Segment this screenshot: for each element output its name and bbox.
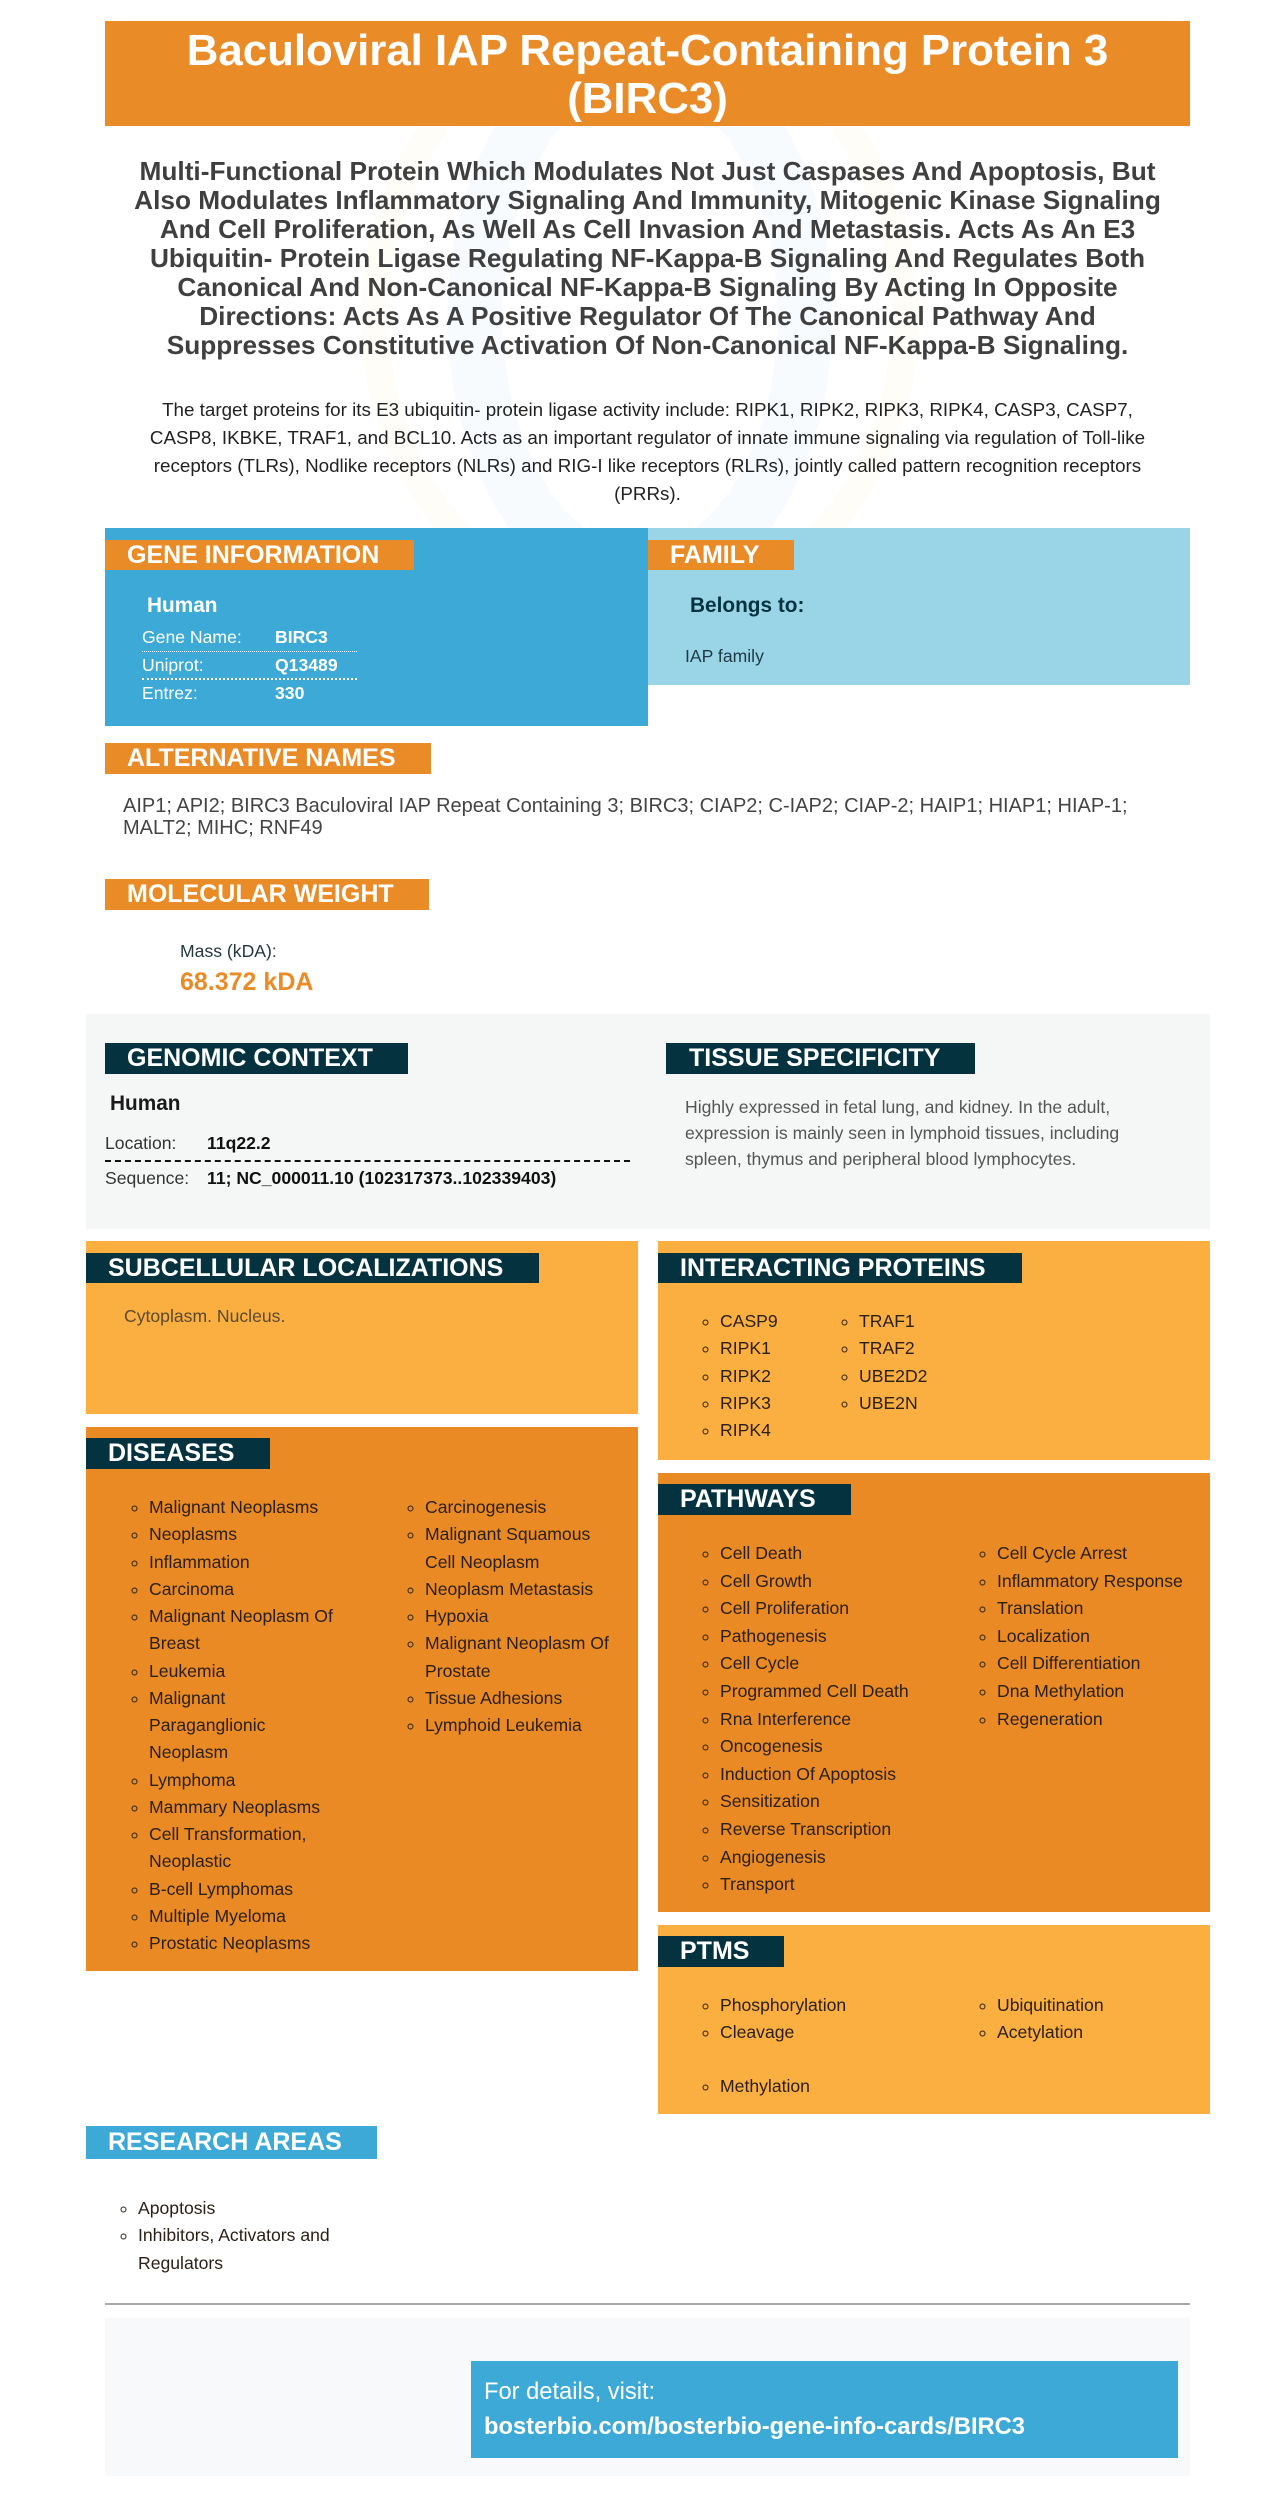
description text block: The target proteins for its E3 ubiquitin- protein ligase activity include: RIPK1, RIPK2, RIPK3, RIPK4, CASP3, CASP7, [162,399,1133,420]
disease list column 1: Paraganglionic [149,1715,265,1735]
gene info table: Gene Name: [142,627,242,647]
genomic table: 11q22.2 [207,1133,271,1153]
panel: genomic context and tissue specificity [86,1014,1210,1229]
disease list column 2: Cell Neoplasm [425,1552,539,1572]
disease list column 1: Carcinoma [149,1579,234,1599]
disease list column 1: Mammary Neoplasms [149,1797,320,1817]
tissue specificity text: Highly expressed in fetal lung, and kidney. In the adult, [685,1097,1110,1117]
disease list column 1: Breast [149,1633,200,1653]
panel: interacting proteins [658,1241,1210,1460]
disease list column 1 [132,1497,333,1953]
heading: genomic context: GENOMIC CONTEXT [127,1044,373,1072]
subtitle text block: Canonical And Non-Canonical NF-Kappa-B Signaling By Acting In Opposite [177,272,1118,302]
disease list column 1: B-cell Lymphomas [149,1878,293,1898]
description text block [150,399,1145,504]
disease list column 2: Hypoxia [425,1606,489,1626]
description text block: receptors (TLRs), Nodlike receptors (NLRs) and RIG-I like receptors (RLRs), jointly called pattern recognition receptors [154,455,1141,476]
heading: family [648,540,794,570]
subtitle text block: Multi-Functional Protein Which Modulates Not Just Caspases And Apoptosis, But [140,156,1156,186]
heading: PTMs [658,1936,784,1967]
pathway list column 1: Cell Death [720,1543,802,1563]
callout url: bosterbio.com/bosterbio-gene-info-cards/BIRC3 [484,2414,1025,2440]
localization text: Cytoplasm. Nucleus. [124,1306,285,1326]
description text block: CASP8, IKBKE, TRAF1, and BCL10. Acts as an important regulator of innate immune signaling via regulation of Toll-like [150,427,1145,448]
description text block: (PRRs). [614,483,681,504]
pathway list column 1: Cell Growth [720,1571,812,1591]
pathway list column 1: Pathogenesis [720,1626,827,1646]
pathway list column 1: Oncogenesis [720,1736,823,1756]
disease list column 2: Malignant Neoplasm Of [425,1633,609,1653]
alternative names text: MALT2; MIHC; RNF49 [123,817,323,839]
pathway list column 2: Dna Methylation [997,1681,1124,1701]
heading: research areas [86,2126,377,2159]
pathway list column 2: Regeneration [997,1709,1103,1729]
research areas list: Apoptosis [138,2198,215,2218]
pathway list column 1: Angiogenesis [720,1847,826,1867]
tissue specificity text: spleen, thymus and peripheral blood lymphocytes. [685,1149,1076,1169]
subtitle text block: Ubiquitin- Protein Ligase Regulating NF-Kappa-B Signaling And Regulates Both [150,243,1145,273]
heading: pathways [658,1484,851,1515]
pathway list column 1: Cell Cycle [720,1653,799,1673]
gene info table: Q13489 [275,655,338,675]
protein list column 2: TRAF1 [859,1311,915,1331]
heading: alternative names: ALTERNATIVE NAMES [127,744,396,772]
tissue specificity text [685,1097,1119,1169]
pathway list column 2: Cell Cycle Arrest [997,1543,1127,1563]
panel: gene information [105,528,648,726]
genomic table [105,1133,630,1188]
disease list column 1: Malignant [149,1688,225,1708]
family value: IAP family [685,646,764,666]
PTM list column 2: Acetylation [997,2022,1083,2042]
PTM list column 2: Ubiquitination [997,1995,1104,2015]
mass value: 68.372 kDA [180,968,313,996]
protein list column 2: UBE2D2 [859,1366,927,1386]
background watermark [340,126,960,528]
pathway list column 2: Translation [997,1598,1083,1618]
PTM list column 1 [702,1995,846,2096]
disease list column 1: Prostatic Neoplasms [149,1933,310,1953]
title [105,21,1190,126]
heading: family: FAMILY [670,541,759,569]
protein list column 1: RIPK3 [720,1393,771,1413]
genomic table: Location: [105,1133,176,1153]
PTM list column 2 [980,1995,1104,2042]
disease list column 2 [408,1497,609,1735]
disease list column 2: Malignant Squamous [425,1524,590,1544]
pathway list column 1: Sensitization [720,1791,820,1811]
PTM list column 1: Cleavage [720,2022,794,2042]
subtitle text block: Also Modulates Inflammatory Signaling And Immunity, Mitogenic Kinase Signaling [134,185,1161,215]
pathway list column 2 [980,1543,1183,1729]
heading: pathways: PATHWAYS [680,1485,816,1513]
heading: PTMs: PTMS [680,1937,749,1965]
protein list column 1: RIPK1 [720,1338,771,1358]
research areas list: Inhibitors, Activators and [138,2225,330,2245]
pathway list column 2: Inflammatory Response [997,1571,1183,1591]
pathway list column 2: Localization [997,1626,1090,1646]
disease list column 1: Leukemia [149,1660,225,1680]
pathway list column 1 [702,1543,909,1894]
disease list column 1: Neoplasm [149,1742,228,1762]
pathway list column 1: Programmed Cell Death [720,1681,909,1701]
panel: pathways [658,1473,1210,1912]
tissue specificity text: expression is mainly seen in lymphoid tissues, including [685,1123,1119,1143]
panel: subcellular localizations [86,1241,638,1414]
genomic table: 11; NC_000011.10 (102317373..102339403) [207,1168,556,1188]
pathway list column 1: Transport [720,1874,795,1894]
protein list column 2: TRAF2 [859,1338,915,1358]
research areas list: Regulators [138,2253,223,2273]
subtitle text block: Suppresses Constitutive Activation Of Non-Canonical NF-Kappa-B Signaling. [167,330,1128,360]
PTM list column 1: Methylation [720,2076,810,2096]
protein list column 1 [702,1311,778,1440]
pathway list column 1: Cell Proliferation [720,1598,849,1618]
disease list column 2: Tissue Adhesions [425,1688,562,1708]
mass label: Mass (kDA): [180,941,277,961]
disease list column 1: Lymphoma [149,1770,235,1790]
panel: PTMs [658,1925,1210,2114]
footer divider [105,2303,1190,2305]
disease list column 1: Malignant Neoplasms [149,1497,318,1517]
callout: details link [471,2361,1178,2458]
disease list column 1: Inflammation [149,1552,250,1572]
heading: interacting proteins: INTERACTING PROTEINS [680,1254,986,1282]
research areas list [120,2198,330,2273]
pathway list column 1: Rna Interference [720,1709,851,1729]
disease list column 2: Lymphoid Leukemia [425,1715,582,1735]
disease list column 1: Cell Transformation, [149,1824,306,1844]
gene info table: BIRC3 [275,627,328,647]
title: (BIRC3) [567,74,728,123]
belongs to label: Belongs to: [690,594,804,617]
disease list column 1: Malignant Neoplasm Of [149,1606,333,1626]
disease list column 1: Neoplastic [149,1851,231,1871]
genomic table: Sequence: [105,1168,189,1188]
disease list column 2: Carcinogenesis [425,1497,546,1517]
disease list column 2: Neoplasm Metastasis [425,1579,593,1599]
alternative names text: AIP1; API2; BIRC3 Baculoviral IAP Repeat Containing 3; BIRC3; CIAP2; C-IAP2; CIAP-2; HAIP1; HIAP1; HIAP-1; [123,795,1128,817]
heading: subcellular localizations: SUBCELLULAR LOCALIZATIONS [108,1254,503,1282]
heading: diseases [86,1438,270,1469]
subtitle text block [134,156,1161,360]
panel: diseases [86,1427,638,1971]
species label: Human [147,594,217,617]
heading: molecular weight: MOLECULAR WEIGHT [127,880,394,908]
PTM list column 1: Phosphorylation [720,1995,846,2015]
gene info table: Uniprot: [142,655,204,675]
disease list column 1: Multiple Myeloma [149,1906,286,1926]
panel: footer [105,2318,1190,2476]
callout label: For details, visit: [484,2379,655,2405]
heading: research areas: RESEARCH AREAS [108,2128,342,2156]
heading: diseases: DISEASES [108,1439,234,1467]
protein list column 1: RIPK2 [720,1366,771,1386]
subtitle text block: Directions: Acts As A Positive Regulator Of The Canonical Pathway And [199,301,1096,331]
protein list column 1: RIPK4 [720,1420,771,1440]
alternative names text [123,795,1128,839]
pathway list column 2: Cell Differentiation [997,1653,1140,1673]
gene info table [142,627,357,703]
pathway list column 1: Reverse Transcription [720,1819,891,1839]
subtitle text block: And Cell Proliferation, As Well As Cell Invasion And Metastasis. Acts As An E3 [160,214,1135,244]
pathway list column 1: Induction Of Apoptosis [720,1764,896,1784]
protein list column 1: CASP9 [720,1311,778,1331]
disease list column 2: Prostate [425,1660,491,1680]
heading: gene information: GENE INFORMATION [127,541,379,569]
panel: family [648,528,1190,685]
title: Baculoviral IAP Repeat-Containing Protein 3 [187,26,1108,75]
species label: Human [110,1092,180,1115]
protein list column 2 [842,1311,927,1413]
gene info table: 330 [275,683,304,703]
protein list column 2: UBE2N [859,1393,918,1413]
heading: tissue specificity: TISSUE SPECIFICITY [689,1044,940,1072]
gene info table: Entrez: [142,683,198,703]
disease list column 1: Neoplasms [149,1524,237,1544]
